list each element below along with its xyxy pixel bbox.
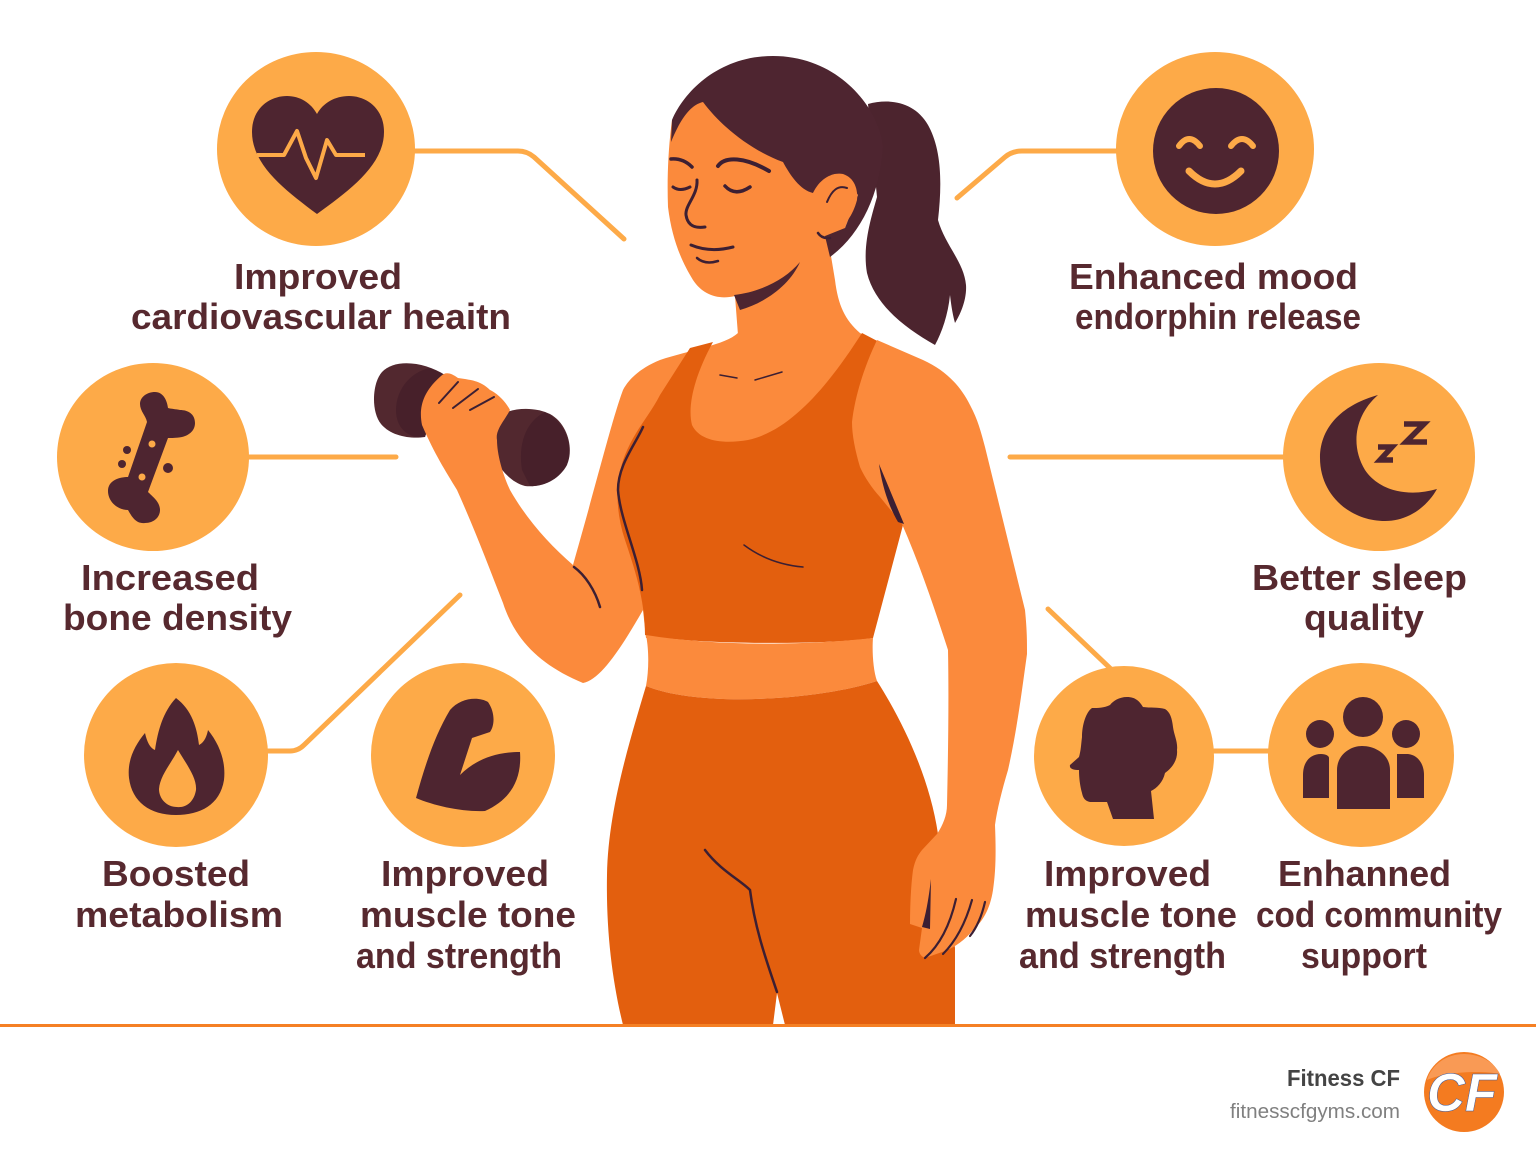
bottom rule (0, 1024, 1536, 1027)
label: mood: endorphin release (1075, 296, 1361, 337)
leggings (607, 681, 955, 1025)
label: community (1256, 853, 1502, 976)
figure: woman holding dumbbell (374, 56, 1027, 1025)
icon: flexed arm (371, 663, 555, 847)
icon: flame (84, 663, 268, 847)
skin: lowered arm and hand (852, 340, 1027, 958)
label: community: Enhanned (1278, 853, 1451, 894)
logo: CF badge (1424, 1052, 1504, 1132)
label: cardiovascular: Improved (234, 256, 402, 297)
footer brand text: Fitness CF (1287, 1065, 1400, 1091)
label: community: cod community (1256, 894, 1502, 935)
label: mood (1069, 256, 1361, 337)
label: cardiovascular: cardiovascular heaitn (131, 296, 511, 337)
label: muscle tone left: Improved (381, 853, 549, 894)
label: bone density: bone density (63, 597, 292, 638)
icon: moon and zzz (1283, 363, 1475, 551)
icon: community group (1268, 663, 1454, 847)
waistband (646, 635, 877, 699)
footer brand text (1230, 1065, 1400, 1123)
icon: bone (57, 363, 249, 551)
logo: CF badge: CF (1427, 1063, 1499, 1123)
dumbbell (374, 363, 570, 486)
label: cardiovascular (131, 256, 511, 337)
label: sleep: quality (1304, 597, 1424, 638)
connector lines (245, 151, 1290, 751)
neck shadow (734, 262, 800, 310)
label: muscle tone right: and strength (1019, 935, 1226, 976)
label: metabolism: Boosted (102, 853, 250, 894)
armpit and thumb slivers (879, 464, 931, 929)
ponytail (866, 102, 966, 345)
skin: chest and raised arm (421, 250, 880, 683)
label: mood: Enhanced mood (1069, 256, 1358, 297)
label: muscle tone right: muscle tone (1025, 894, 1237, 935)
footer brand text: fitnesscfgyms.com (1230, 1101, 1400, 1123)
label: metabolism (75, 853, 283, 935)
face and neck (668, 98, 858, 335)
label: muscle tone left: muscle tone (360, 894, 576, 935)
label: sleep: Better sleep (1252, 557, 1467, 598)
icon: smile (1116, 52, 1314, 246)
head (668, 56, 883, 335)
label: sleep (1252, 557, 1467, 638)
icon: heart (217, 52, 415, 246)
label: bone density (63, 557, 292, 638)
facial features (671, 159, 847, 262)
label: muscle tone left: and strength (356, 935, 562, 976)
label: muscle tone left (356, 853, 576, 976)
hair (671, 56, 883, 257)
icon: head profile (1034, 666, 1214, 846)
label: bone density: Increased (81, 557, 259, 598)
label: metabolism: metabolism (75, 894, 283, 935)
label: muscle tone right (1019, 853, 1237, 976)
label: community: support (1301, 935, 1427, 976)
body detail lines (439, 372, 985, 992)
ear (813, 174, 857, 234)
label: muscle tone right: Improved (1044, 853, 1211, 894)
crop top (618, 333, 903, 643)
